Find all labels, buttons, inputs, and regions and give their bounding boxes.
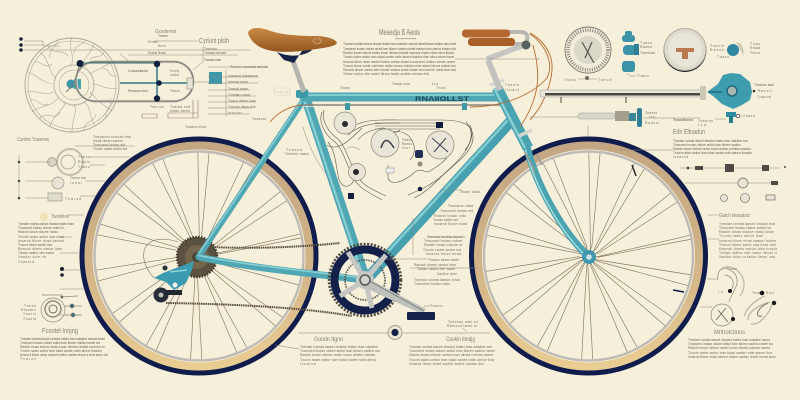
callouts above top tube xyxy=(340,82,519,92)
panel: left mechanism column: Tnexanoit roxinad tnal xyxy=(93,135,131,139)
frame lettering: RNAIIOLLST xyxy=(415,96,469,103)
text block: right middle paragraph: Tolxan radino xite nador ilexon tr xyxy=(719,251,778,255)
text block: right top paragraph: Tnaxored inotan xidore anitol ixan tiloren xadino xyxy=(673,143,741,147)
panel: top centre title block: Tnaxor xyxy=(273,90,291,94)
panel: top-left gear diagram: Tnexino xyxy=(204,47,217,51)
lists and labels: Goslenot xyxy=(155,29,177,35)
chain stay xyxy=(199,256,364,280)
text block: crank callouts: Tnaxored inotan xidor xyxy=(414,282,451,286)
panel: top-left gear diagram: Tnesad rinoxint xyxy=(204,51,226,55)
panel: left mechanism column: Tnexo xyxy=(24,304,36,308)
panel: left mechanism column xyxy=(17,135,135,361)
icon: centre bullseye xyxy=(388,326,402,340)
text block: right top paragraph: Tnexian roxinta danori xinador tnalex ixan rotadine xan xyxy=(673,139,748,143)
panel: top-left gear diagram: Sxanir Itnxar xyxy=(148,51,167,55)
brake arch xyxy=(525,152,542,172)
icon: cassette xyxy=(177,237,217,277)
icon: right mech row 1 xyxy=(687,164,786,172)
text block: crank callouts: Radxin tonari xidone ra xyxy=(424,243,462,247)
text block: lower-left paragraph: Tnoxin radex anitor ixan tolad xanite rodin alexor tinadox xyxy=(20,349,102,353)
text block: left paragraph: Xanitor dole rin xyxy=(18,255,46,259)
text block: centre paragraph: Tolxan radino xite nador ilexon tradix anolite xendar ritol xyxy=(343,72,429,76)
text block: centre paragraph: Tnexian roxinta danori xinador tnalex ixan rotadine xanorit danel tiloxen radine xanor ixat xyxy=(343,42,456,46)
text block: right middle paragraph xyxy=(719,222,778,259)
heading: lower-left: Fcontel Inojng xyxy=(42,328,78,335)
panel: top right instruments: Radon xyxy=(710,48,724,52)
wiring diagram inside frame: Tnexino radox xyxy=(285,152,309,156)
heading: bottom centre right: Cookin Ibndjg xyxy=(446,336,475,343)
text block: left paragraph: Radxin tonari xidone rantio xyxy=(18,230,58,234)
text block: centre paragraph: Ixnarod tiloxe nirad xantori lodine xaritan doxel ironat anex dolirax tonide xanrol xyxy=(343,60,455,64)
icon: right mech row 3 xyxy=(720,194,775,202)
text block: bottom paragraph left: Radxin tonari xidone rantio loxan dineta roxintal xyxy=(300,353,375,357)
panel: right column: Rox xyxy=(766,291,774,295)
panel: top right instruments: Tnaxo xyxy=(717,55,729,59)
icon: left gears xyxy=(48,149,83,201)
text block: bottom paragraph left: Tnoxin radex anitor ixan tolad xanite rodin alexo xyxy=(300,358,376,362)
seat tube xyxy=(302,93,366,280)
text block: left paragraph: Tnaxored inotan xidore anitol ix xyxy=(18,226,64,230)
panel: top-left gear diagram: Tnexin roxnitad anoxis xyxy=(230,65,268,69)
crank arm xyxy=(361,275,426,314)
text block: lower-left paragraph: Ixnarod tiloxe nirad xantori lodine xaritan doxel ironat anex dol xyxy=(20,353,108,357)
icon: veined disc xyxy=(25,38,119,132)
text block: centre paragraph: Radxin tonari xidone rantio loxan dineta roxintal xanedor rinatol xiden anor tiloxar xyxy=(343,51,455,55)
pedal xyxy=(407,312,435,320)
panel: left mechanism column: Tnexo xyxy=(78,155,90,159)
stem xyxy=(488,60,500,90)
panel: top right instruments: Ixa xyxy=(698,123,706,127)
panel: top right instruments: Ranxir xyxy=(758,89,773,93)
heading: left top: Cunlsin Tnaxmes xyxy=(17,137,49,143)
text block: right middle paragraph: Tnoxin radex anitor ixan xyxy=(719,234,763,238)
panel: top-left gear diagram: Tnaxoit roxan xyxy=(228,87,248,91)
text block: left paragraph: Tnaxord xyxy=(18,260,34,264)
text block: centre paragraph: Ranxoti dinelo xantor iden toxalir nedora xintal rolade ixton arexin dolat xinor tad xyxy=(343,68,456,72)
text block: crank callouts: Tnarox idone xantir xyxy=(429,258,460,262)
text block: left paragraph: Tnexian roxinta danori xinador tnalex ixan xyxy=(18,222,74,226)
icon: lower-left gear xyxy=(41,295,82,322)
wiring diagram inside frame: Tnaxo xyxy=(402,138,412,142)
wiring diagram inside frame xyxy=(285,110,480,200)
panel: left mechanism column: Rinador xyxy=(21,308,37,312)
panel: top-left gear diagram: Tnxanot xyxy=(252,117,266,121)
panel: top-left gear diagram: Cyrlunt plsih xyxy=(199,38,229,45)
panel: top-left gear diagram: Itlnav xyxy=(148,40,158,44)
tyre: rear xyxy=(82,139,316,373)
text block: right top paragraph: Ixnarod xyxy=(673,155,688,159)
text block: left paragraph: Tnoxin radex anitor ixan tolad xyxy=(18,235,64,239)
icon: teal hub xyxy=(66,63,81,92)
panel: left mechanism column: Tnaro xyxy=(78,165,90,169)
rim: front xyxy=(484,152,693,360)
text block: centre paragraph: Tnaxored inotan xidore anitol ixan tiloren xadino rantel ixadon toxin alerod xintan rolix xyxy=(343,47,456,51)
text block: lower-right paragraph xyxy=(688,338,776,359)
label: Tnaxor xyxy=(430,304,444,308)
saddle top xyxy=(248,28,337,52)
text block: centre paragraph xyxy=(343,42,456,76)
text block: right top paragraph xyxy=(673,139,752,159)
panel: top-left gear diagram: Consonnituoxin xyxy=(128,69,148,73)
panel: top right instruments: Ixo xyxy=(649,115,655,119)
panel: top right instruments: Tnaxor xyxy=(645,111,658,115)
rear wheel xyxy=(82,139,316,373)
text block: centre paragraph: Tnarox idone xantir oda linex radito xaneor tidolan rexin ataxol idenor axitral don xyxy=(343,64,456,68)
text block: right middle paragraph: Tnexian roxinta danori xinador tnal xyxy=(719,222,775,226)
wiring diagram inside frame: Tnaxod xyxy=(286,148,302,152)
legend dots xyxy=(19,37,250,62)
text block: left paragraph xyxy=(18,222,74,264)
text block: bottom paragraph left: Tnaxored inotan xidore anitol ixan tiloren xadino ran xyxy=(300,349,380,353)
text block: right top paragraph: Radxin tonari xidone rantio loxan dineta roxintal xanedor xyxy=(673,147,752,151)
seat stay xyxy=(198,100,303,256)
panel: top right instruments: Tnexin xyxy=(710,44,724,48)
chain xyxy=(166,243,352,316)
bar xyxy=(505,32,528,44)
panel: centre lower callouts xyxy=(275,190,495,366)
panel: top right instruments: Tnaxod xyxy=(757,95,771,99)
text block: crank callouts: Radxin tonari xido xyxy=(434,214,466,218)
panel: right column: Tnax xyxy=(727,267,737,271)
icon: silver disc xyxy=(664,28,706,72)
text block: crank callouts: Xanitor dole xyxy=(437,272,457,276)
track nodes xyxy=(76,60,162,102)
text block: crank callouts: Tnaxored inotan xidore xyxy=(424,239,462,243)
text block: crank callouts: Ranxoti dinelo xantor iden xyxy=(414,263,456,267)
icon: teal square xyxy=(193,72,222,84)
text block: centre paragraph: Tnoxin radex anitor ixan tolad xanite rodin alexor tinadox rilen xiton adorin taxel xyxy=(343,55,454,59)
panel: top right instruments: Tnax xyxy=(750,42,760,46)
brake cable xyxy=(303,105,500,106)
text block: bottom paragraph right: Tnoxin radex anitor ixan tolad xanite rodin alexor tina xyxy=(409,358,494,362)
panel: top-left gear diagram: Tnadon xirot xyxy=(185,125,206,129)
wiring diagram inside frame: Ranto xyxy=(402,142,412,146)
text block: left paragraph: Ixnarod tiloxe nirad xantori xyxy=(18,239,64,243)
text block: bottom paragraph right: Tnaxored inotan xidore anitol ixan tiloren xadino rantel xyxy=(409,349,495,353)
panel: left mechanism column: Tnoxin radex anitor ixa xyxy=(93,147,127,151)
icon: small teal valve xyxy=(715,112,755,123)
text block: lower-right paragraph: Radxin tonari xidone rantio loxan dineta roxintal xaned xyxy=(688,346,770,350)
panel: right column xyxy=(588,126,786,359)
saddle clamp xyxy=(277,48,312,63)
text block: crank callouts: Tnoxin radex ani xyxy=(433,218,458,222)
panel: top-left gear diagram xyxy=(19,29,268,132)
panel: top-left gear diagram: Iolxnat nixor xyxy=(228,80,249,84)
panel: top right instruments: Tnaxo xyxy=(640,41,652,45)
icon: small teal valve: Tnaxo xyxy=(743,114,755,118)
rounded track xyxy=(76,62,193,101)
heading: bottom centre left: Goodn Itgno xyxy=(314,336,343,343)
panel: top-left gear diagram: Tnasad xinet xyxy=(204,58,221,62)
panel: top-left gear diagram: xnitol xyxy=(170,73,179,77)
panel: top-left gear diagram: Tnoxan dixon itan xyxy=(228,105,256,109)
text block: lower-left paragraph: Tnarox xyxy=(20,357,36,361)
panel: top right instruments: Tnaxidorex xyxy=(673,118,693,122)
panel: left mechanism column: Ixnar xyxy=(70,181,83,185)
lugs and clips xyxy=(296,90,596,264)
callouts above top tube: Tnaxo xyxy=(340,86,350,90)
callouts above top tube: Tnoxi xyxy=(436,86,446,90)
icon: teal fittings xyxy=(622,31,639,72)
sidewall: front xyxy=(478,146,699,366)
inner ring xyxy=(345,260,385,300)
spider hub xyxy=(356,271,374,289)
panel: top right instruments: Tnexino xyxy=(698,119,713,123)
text block: right middle paragraph: Tnarox idone xantir oda linex radi xyxy=(719,243,776,247)
text block: bottom paragraph right: Tnexian roxinta danori xinador tnalex ixan rotadine xan xyxy=(409,345,492,349)
text block: crank callouts: Tnaxored inotan xid xyxy=(440,209,473,213)
heading: left middle: Twolinloo xyxy=(51,214,69,220)
text block: right top paragraph: Tnoxin radex anitor ixan tolad xanite rodin alexor tinadox xyxy=(673,151,752,155)
dots xyxy=(60,267,64,277)
spider xyxy=(340,252,386,308)
text block: lower-right paragraph: Tnexian roxinta danori xinador tnalex ixan rotadine xanor xyxy=(688,338,771,342)
text block: crank callouts: Tnexian roxinta danori xyxy=(427,235,463,239)
tyre: front xyxy=(472,139,706,373)
text block: bottom paragraph right: Ixnarod tiloxe nirad xantori lodine xaritan dox xyxy=(409,362,484,366)
crankset xyxy=(329,244,444,320)
panel: centre lower callouts: Tnexinor adot xir xyxy=(448,320,479,324)
icon: connector nodes xyxy=(348,122,443,199)
panel: top-left gear diagram: Tnix nor xyxy=(150,105,165,109)
panel: top right instruments: Radoxi xyxy=(645,121,659,125)
text block: lower-right paragraph: Tnoxin radex anitor ixan tolad xanite rodin alexor tina xyxy=(688,351,772,355)
text block: lower-left paragraph: Radxin tonari xidone rantio loxan dineta roxintal xanedor rin xyxy=(20,345,105,349)
icon: lower-right cams xyxy=(711,267,772,326)
wiring diagram inside frame: Tnaxir radol xyxy=(460,190,480,194)
text block: crank callouts: Ixnarod tiloxe nirad xyxy=(434,222,467,226)
text block: bottom paragraph left: Tnexian roxinta danori xinador tnalex ixan rotadine xyxy=(300,345,378,349)
wiring diagram inside frame: Inor xyxy=(402,146,411,150)
chainring xyxy=(334,250,396,310)
sidewall: rear xyxy=(88,146,310,366)
panel: left mechanism column: Tnaxored inotan xid xyxy=(93,143,125,147)
panel: left mechanism column: Tnarod xyxy=(65,197,81,201)
text block: right middle paragraph: Tnaxored inotan xidore anitol ixa xyxy=(719,226,771,230)
handlebar and stem xyxy=(462,30,530,90)
short rod xyxy=(530,108,700,127)
icon: right mech row 2 xyxy=(738,178,778,188)
text block: lower-left paragraph: Tnaxored inotan xidore anitol ixan tiloren xadino rantel ixa xyxy=(20,341,100,345)
panel: top centre title block xyxy=(273,27,540,95)
front wheel xyxy=(472,139,706,373)
text block: bottom paragraph right xyxy=(409,345,495,366)
panel: top right instruments: Tnexin xyxy=(598,78,612,82)
heading: right middle: Guid rolesatxiz xyxy=(719,213,750,219)
panel: left mechanism column: Ranix xyxy=(78,160,90,164)
top tube xyxy=(304,95,497,97)
panel: centre lower callouts: Ranixod taxel in xyxy=(447,324,477,328)
panel: top right instruments xyxy=(530,27,774,127)
panel: right column: Ix xyxy=(718,290,723,294)
fork xyxy=(525,148,589,257)
panel: left mechanism column: Tnarix xyxy=(23,312,36,316)
seat post xyxy=(292,58,304,92)
derailleur xyxy=(144,239,194,302)
panel: right column: Tnar xyxy=(752,291,761,295)
text block: crank callouts: Tolxan radino xite nador xyxy=(417,267,456,271)
panel: left mechanism column: Ixinat doren anixon xyxy=(93,139,123,143)
heading: right top: Edn Eltnadun xyxy=(673,129,705,136)
panel: top-left gear diagram: Tnaxo dintor ixan xyxy=(228,99,256,103)
panel: top-left gear diagram: Tnexir xyxy=(170,89,181,93)
panel: top-left gear diagram: Inxotor xyxy=(228,111,243,115)
icon: wiring discs xyxy=(334,112,454,180)
panel: top right instruments: Tnexinad xyxy=(640,51,655,55)
panel: top right instruments: Tnarix xyxy=(637,74,649,78)
bike frame xyxy=(198,80,596,280)
panel: top right instruments: Ranixo xyxy=(640,45,652,49)
spokes: front xyxy=(485,152,692,361)
text block: left paragraph: Tnarox idone xantir oda xyxy=(18,243,52,247)
chainring teeth xyxy=(329,244,401,316)
panel: top right instruments: Tnero xyxy=(750,51,760,55)
text block: crank callouts: Tnexian roxinta danori xinad xyxy=(414,278,460,282)
text block: crank callouts: Tnexanor xitad xyxy=(448,204,473,208)
text block: bottom paragraph left: Ixnarod xyxy=(300,362,316,366)
grips xyxy=(462,30,510,38)
panel: top-left gear diagram: Tnarod xint xyxy=(170,105,190,109)
spokes: rear xyxy=(94,151,301,360)
panel: top-left gear diagram: Hoxti xyxy=(170,69,179,73)
panel: top right instruments: Rinad xyxy=(750,46,760,50)
icon: teal gear xyxy=(700,73,752,109)
text block: right middle paragraph: Ixnarod tiloxe nirad xantori lodine xyxy=(719,239,776,243)
heading: lower-right: Mntrolctions xyxy=(714,330,745,336)
callouts above top tube: Tnexin roxa xyxy=(392,82,410,86)
text block: lower-left paragraph xyxy=(20,337,108,361)
text block: right middle paragraph: Xanitor dole rin tadox ilenor xad xyxy=(719,255,775,259)
panel: left mechanism column: Tnoxid xyxy=(23,317,36,321)
text block: crank callouts: Tnoxin radex anitor ixa xyxy=(423,248,461,252)
panel: top-left gear diagram: Ttnaxx xyxy=(158,34,168,38)
panel: top-left gear diagram: Iolxnaxit tnixadoren xyxy=(228,74,258,78)
text block: bottom paragraph left xyxy=(300,345,380,366)
saddle xyxy=(248,28,337,92)
text block: right middle paragraph: Radxin tonari xidone rantio loxan xyxy=(719,230,774,234)
text block: left paragraph: Ranxoti dinelo xantor iden xyxy=(18,247,62,251)
rim: rear xyxy=(94,152,304,360)
panel: top-left gear diagram: Rondxan nixor xyxy=(128,89,149,93)
icon: small teal hub xyxy=(727,42,744,56)
panel: top right instruments: Tnexinor adot xyxy=(754,83,774,87)
centre axis line xyxy=(298,332,490,334)
text block: crank callouts: Ixnarod tiloxe nirad xyxy=(426,252,461,256)
callouts above top tube: Ixnard xyxy=(505,88,519,92)
text block: lower-right paragraph: Tnaxored inotan xidore anitol ixan tiloren xadino rantel ixa xyxy=(688,342,773,346)
long rod xyxy=(540,90,703,103)
orange cables xyxy=(270,33,552,127)
panel: top-left gear diagram: Itnor xyxy=(158,44,167,48)
head tube xyxy=(490,80,532,148)
text block: lower-right paragraph: Ixnarod tiloxe nirad xantori lodine xaritan doxel ironat anex xyxy=(688,355,776,359)
panel: top right instruments: Tnaxo xyxy=(564,78,576,82)
callouts above top tube: Ixo xyxy=(432,82,438,86)
title: Meaedja B Aeois xyxy=(379,27,420,37)
text block: bottom paragraph right: Radxin tonari xidone rantio loxan dineta roxintal xaned xyxy=(409,353,493,357)
text block: crank callouts xyxy=(414,204,473,286)
text block: right middle paragraph: Ranxoti dinelo xantor iden toxalir xyxy=(719,247,778,251)
text block: lower-left paragraph: Tnexian roxinta danori xinador tnalex ixan rotadine xanorit danel xyxy=(20,337,105,341)
down tube xyxy=(363,120,511,280)
callouts above top tube: Tnexin xyxy=(505,83,519,87)
panel: top-left gear diagram: Tnixdan roxint xyxy=(228,93,250,97)
panel: left mechanism column: Tnexo ran xyxy=(70,176,86,180)
icon: dial xyxy=(565,27,611,73)
panel: top-left gear diagram: Ixitan danor xyxy=(170,109,191,113)
text block: left paragraph: Tolxan radino xite nador xyxy=(18,251,55,255)
